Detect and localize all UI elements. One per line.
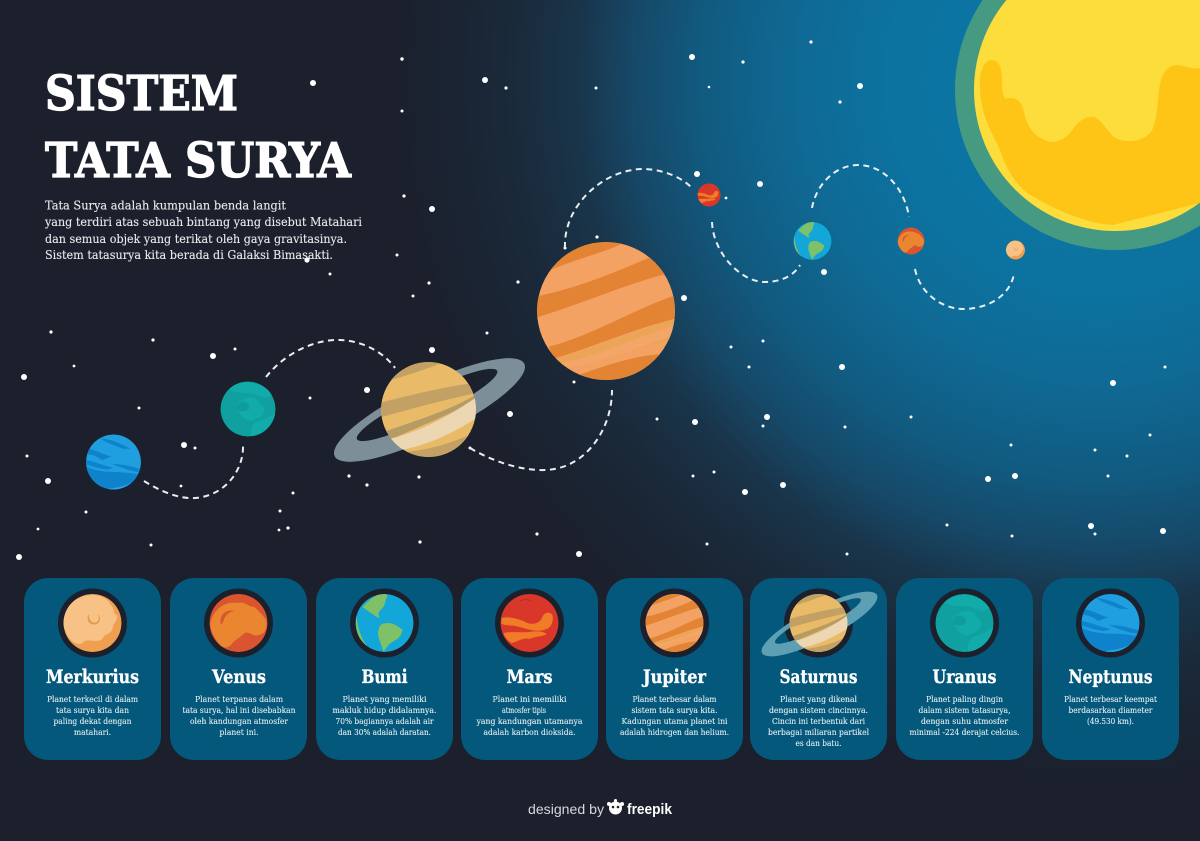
panel: Neptunus: berdasarkan diameter (1068, 705, 1152, 715)
planet: Neptunus large (85, 435, 142, 491)
footer credit: freepik (627, 802, 673, 818)
panel: Jupiter: Kadungan utama planet ini (622, 716, 728, 726)
intro text (44, 198, 362, 262)
panel: Neptunus (1042, 578, 1179, 760)
intro text: Sistem tatasurya kita berada di Galaksi Bimasakti. (45, 248, 333, 262)
panel: Merkurius (24, 578, 161, 760)
panel: Venus: Planet terpanas dalam (195, 694, 283, 704)
panel: Bumi: dan 30% adalah daratan. (338, 727, 431, 737)
sun (955, 0, 1200, 250)
planet: Saturnus large with ring (323, 340, 536, 480)
panel: Neptunus: Neptunus (1068, 666, 1152, 688)
panel: Bumi: makluk hidup didalamnya. (332, 705, 436, 715)
title: TATA SURYA (45, 133, 352, 189)
star field (16, 40, 1166, 560)
panel: Uranus: Uranus (932, 666, 996, 688)
planet: Venus small (897, 227, 925, 255)
intro text: dan semua objek yang terikat oleh gaya gravitasinya. (45, 232, 347, 246)
panel: Mars: yang kandungan utamanya (476, 716, 583, 726)
panel: Venus: planet ini. (220, 727, 258, 737)
panel: Bumi: 70% bagiannya adalah air (336, 716, 434, 726)
panel: Neptunus: (49.530 km). (1087, 716, 1134, 726)
panel: Uranus (896, 578, 1033, 760)
orbit: Saturnus to Jupiter (470, 390, 612, 470)
panel: Venus: oleh kandungan atmosfer (190, 716, 288, 726)
orbit: Venus to Merkurius (915, 269, 1014, 309)
panel: Jupiter (606, 578, 743, 760)
title: SISTEM (45, 66, 238, 122)
panel: Saturnus (750, 578, 887, 760)
panel: Saturnus: dengan sistem cincinnya. (769, 705, 868, 715)
panel: Bumi: Planet yang memiliki (342, 694, 427, 704)
planet: Uranus large (221, 382, 275, 438)
panel: Merkurius: tata surya kita dan (56, 705, 130, 715)
panel: Bumi: Bumi (362, 666, 408, 688)
footer credit (528, 799, 673, 818)
title (45, 66, 352, 189)
panel: Jupiter: Jupiter (641, 666, 707, 688)
panel: Mars: Mars (506, 666, 552, 688)
panel: Uranus: minimal -224 derajat celcius. (910, 727, 1020, 737)
footer credit: designed by (528, 801, 604, 817)
panel: Venus: tata surya, hal ini disebabkan (182, 705, 296, 715)
panel: Mars: atmosfer tipis (502, 705, 546, 715)
panel: Mars: Planet ini memiliki (492, 694, 567, 704)
panel: Venus: Venus (211, 666, 266, 688)
intro text: yang terdiri atas sebuah bintang yang disebut Matahari (44, 215, 362, 229)
panel: Saturnus: Saturnus (780, 666, 858, 688)
intro text: Tata Surya adalah kumpulan benda langit (45, 198, 286, 212)
panel: Mars: adalah karbon dioksida. (484, 727, 576, 737)
panel: Merkurius: Merkurius (46, 666, 139, 688)
planet: Merkurius small (1006, 240, 1025, 260)
panel: Mars (461, 578, 598, 760)
panel: Saturnus: berbagai miliaran partikel (768, 727, 869, 737)
panel: Merkurius: paling dekat dengan (54, 716, 132, 726)
orbit: Jupiter to Mars (565, 169, 693, 248)
panel: Jupiter: adalah hidrogen dan helium. (620, 727, 729, 737)
planet: Jupiter large (535, 240, 677, 385)
orbit: Neptunus to Uranus (144, 445, 243, 498)
panel: Saturnus: Cincin ini terbentuk dari (772, 716, 865, 726)
panel: Merkurius: Planet terkecil di dalam (47, 694, 138, 704)
panel: Saturnus: es dan batu. (796, 738, 842, 748)
panel: Neptunus: Planet terbesar keempat (1064, 694, 1158, 704)
orbit: Bumi to Venus (812, 165, 909, 217)
panel: Merkurius: matahari. (74, 727, 111, 737)
panel: Jupiter: sistem tata surya kita. (632, 705, 718, 715)
panel: Bumi (316, 578, 453, 760)
orbit: Mars to Bumi (712, 222, 800, 282)
panel: Jupiter: Planet terbesar dalam (632, 694, 717, 704)
panel: Uranus: dengan suhu atmosfer (921, 716, 1008, 726)
panel: Saturnus: Planet yang dikenal (780, 694, 857, 704)
orbit: Uranus to Saturnus (266, 340, 395, 377)
planet: Mars small (697, 183, 721, 207)
panel: Uranus: Planet paling dingin (926, 694, 1004, 704)
panel: Venus (170, 578, 307, 760)
panel: Uranus: dalam sistem tatasurya, (918, 705, 1010, 715)
planet: Bumi small (794, 221, 831, 260)
